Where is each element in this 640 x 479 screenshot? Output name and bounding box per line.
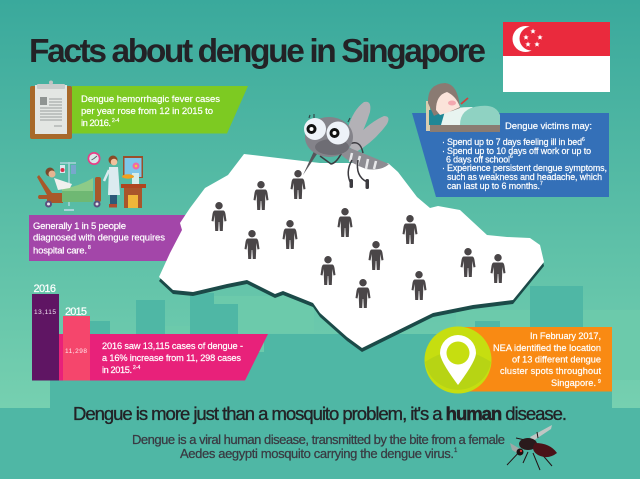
text: hemorrhagic fever: 2-4 <box>112 118 119 124</box>
text: cluster spots: In February 2017, <box>530 331 601 341</box>
text: dengue victims: Spend up to 7 days feeling ill in bed <box>447 137 582 147</box>
people on map <box>212 170 506 308</box>
bar: 2015: 11,298 <box>65 348 87 355</box>
icon: clipboard <box>30 80 72 139</box>
text: dengue victims: 7 <box>540 181 543 187</box>
text: description: 1 <box>454 448 458 454</box>
window and cabinet <box>121 156 146 208</box>
text: cluster spots: cluster spots throughout <box>500 366 601 376</box>
text: description: Aedes aegypti mosquito carrying the dengue virus. <box>180 446 454 461</box>
text: description <box>132 432 505 461</box>
icon: Singapore flag <box>503 22 610 92</box>
map island <box>159 154 544 348</box>
panel: yearly cases text: a 16% increase from 11, 298 cases <box>102 353 241 363</box>
eyes <box>304 118 350 144</box>
text: hospital care: Generally 1 in 5 people <box>33 221 126 232</box>
bar: 2015 <box>63 306 90 380</box>
panel: cluster spots <box>424 326 612 394</box>
text: hospital care: 8 <box>88 245 91 251</box>
text: dengue victims <box>442 121 607 191</box>
text: dengue victims: 6 <box>510 154 513 160</box>
bar: 2015: 2015 <box>65 306 87 318</box>
text: cluster spots: Singapore. <box>551 378 596 388</box>
text: dengue victims: Spend up to 10 days off work or up to <box>447 146 591 156</box>
text: dengue victims: 6 days off school <box>446 154 510 164</box>
text: hospital care <box>33 221 165 256</box>
icon: location pin <box>424 326 492 394</box>
abdomen <box>340 146 389 169</box>
text: dengue victims: can last up to 6 months. <box>447 181 540 191</box>
proboscis <box>303 149 319 175</box>
text: dengue victims: 6 <box>582 137 585 143</box>
title: Facts about dengue in Singapore <box>29 33 486 70</box>
map of Singapore <box>159 154 544 352</box>
panel: yearly cases text: in 2015. <box>102 365 132 375</box>
text: dengue victims: Dengue victims may: <box>505 121 592 132</box>
text: description: Dengue is a viral human disease, transmitted by the bite from a female <box>132 432 505 447</box>
bar: 2016 <box>32 283 59 380</box>
text: hemorrhagic fever: Dengue hemorrhagic fever cases <box>81 94 220 105</box>
panel: yearly cases text <box>59 334 268 380</box>
headline: Dengue is more just than a mosquito problem, it's a human disease. <box>73 403 567 424</box>
doctor <box>104 156 120 208</box>
IV stand <box>60 162 76 210</box>
text: cluster spots: 9 <box>598 379 601 385</box>
text: hospital care: diagnosed with dengue requires <box>33 232 165 244</box>
text: cluster spots <box>493 331 601 388</box>
text: hemorrhagic fever <box>81 94 220 129</box>
panel: dengue victims <box>412 113 609 197</box>
panel: hospital care <box>29 215 189 261</box>
text: cluster spots: of 13 different dengue <box>512 354 601 364</box>
legs <box>320 143 367 184</box>
text: dengue victims: such as weakness and headache, which <box>447 172 602 182</box>
text: dengue victims: · <box>442 146 445 156</box>
bed <box>37 175 101 208</box>
icon: cartoon mosquito <box>303 102 389 189</box>
panel: yearly cases text: 2-4 <box>133 365 140 371</box>
text: hemorrhagic fever: in 2016. <box>81 118 111 129</box>
icon: sick person in bed <box>426 83 500 132</box>
patient <box>46 168 72 190</box>
text: cluster spots: NEA identified the location <box>493 343 601 353</box>
panel: yearly cases text: 2016 saw 13,115 cases of dengue - <box>102 341 243 351</box>
text: dengue victims: · <box>442 163 445 173</box>
text: dengue victims: · <box>442 137 445 147</box>
bar: 2016: 2016 <box>34 283 56 295</box>
head <box>305 117 353 157</box>
text: hemorrhagic fever: per year rose from 12 in 2015 to <box>81 106 213 117</box>
panel: chart, dengue cases <box>32 283 268 380</box>
text: hospital care: hospital care. <box>33 246 87 256</box>
icon: hospital room <box>37 152 146 210</box>
panel: hemorrhagic fever cases <box>30 80 248 139</box>
wings <box>345 102 388 152</box>
bar: 2016: 13,115 <box>34 309 56 316</box>
clock <box>88 152 100 165</box>
text: dengue victims: Experience persistent dengue symptoms, <box>447 163 607 173</box>
icon: realistic mosquito <box>507 425 557 470</box>
map shadow <box>159 158 544 352</box>
